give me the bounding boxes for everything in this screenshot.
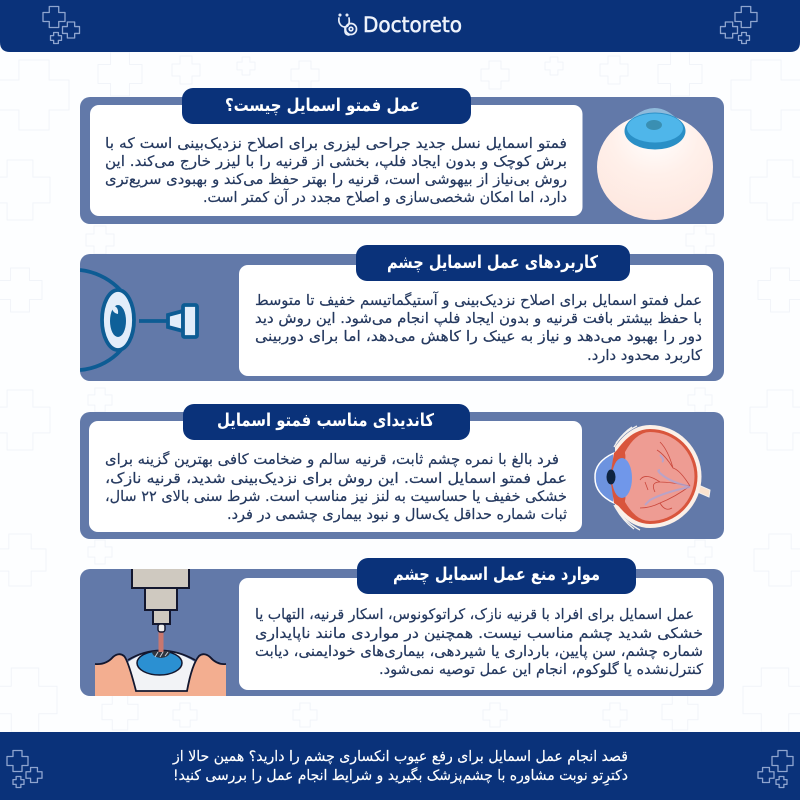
heading bar [356,245,630,281]
body text: خشکی خفیف یا حساسیت به لنز نیز مناسب است. شرط سنی بالای ۲۲ سال، [105,489,567,505]
body text: عمل اسمایل برای افراد با قرنیه نازک، کراتوکونوس، اسکار قرنیه، التهاب یا [255,607,694,623]
icon: eyeball with contact lens [597,108,713,220]
text box [239,265,713,376]
body text: عمل فمتو اسمایل است. این روش برای نزدیک‌بینی شدید، قرنیه نازک، [105,471,567,487]
body text: کاربرد محدود دارد. [587,348,702,364]
heading: کاربردهای عمل اسمایل چشم [387,253,599,273]
text box [239,578,713,690]
text box [90,105,582,216]
body text: دور را بهبود می‌دهد و نیاز به عینک را کاهش می‌دهد، اما برای دوربینی [255,329,702,345]
body text: ثبات شماره حداقل یک‌سال و نبود بیماری چشمی در فرد. [227,507,567,523]
body text: خشکی شدید چشم مناسب نیست. همچنین در مواردی مانند ناپایداری [255,626,703,642]
footer text: قصد انجام عمل اسمایل برای رفع عیوب انکساری چشم را دارید؟ همین حالا از [172,749,628,765]
icon: header crosses right [720,6,757,44]
icon: header crosses left [43,6,80,44]
body text: عمل فمتو اسمایل برای اصلاح نزدیک‌بینی و آستیگماتیسم خفیف تا متوسط [255,291,702,309]
heading bar [357,558,636,594]
heading bar [183,404,470,440]
body text [105,136,567,206]
body text: شماره چشم، سن پایین، بارداری یا شیردهی، بیماری‌های خودایمنی، دیابت [255,644,703,660]
logo: wordmark: Doctoreto [363,13,462,37]
body text: با حفظ بیشتر بافت قرنیه و بدون ایجاد فلپ انجام می‌شود. این روش دید [255,311,702,327]
heading: عمل فمتو اسمایل چیست؟ [225,96,420,116]
footer text: دکترِتو نوبت مشاوره با چشم‌پزشک بگیرید و شرایط انجام عمل را بررسی کنید! [173,767,628,786]
body text: دارد، اما امکان شخصی‌سازی و اصلاح مجدد در آن کمتر است. [203,188,567,206]
body text [255,291,702,364]
panel: contraindications [80,558,724,696]
logo: stethoscope icon [339,14,356,35]
footer bar [0,732,800,800]
heading bar [182,88,471,124]
body text: برش کوچک و بدون ایجاد فلپ، بخشی از قرنیه را با لیزر خارج می‌کند. این [105,154,567,171]
icon: footer crosses left [7,750,42,788]
icon: footer crosses right [758,750,793,788]
icon: eye with laser device [80,270,197,370]
footer text [172,749,628,786]
icon: eye anatomy [595,425,710,530]
heading: موارد منع عمل اسمایل چشم [393,565,600,585]
body text [105,451,567,523]
panel: applications [80,245,724,381]
panel: suitable candidates [80,404,724,539]
body text: روش بی‌نیاز از بیهوشی است، قرنیه را بهتر حفظ می‌کند و بهبودی سریع‌تری [105,172,567,188]
body text: کنترل‌نشده یا گلوکوم، انجام این عمل توصیه نمی‌شود. [379,661,703,678]
body text: فرد بالغ با نمره چشم ثابت، قرنیه سالم و ضخامت کافی بهترین گزینه برای [105,451,559,468]
icon: laser device over eye [95,566,226,696]
panel: what is femto smile [80,88,724,224]
body text [255,607,703,678]
body text: فمتو اسمایل نسل جدید جراحی لیزری برای اصلاح نزدیک‌بینی است که با [105,136,567,152]
heading: کاندیدای مناسب فمتو اسمایل [217,411,435,431]
header bar [0,0,800,52]
text box [89,421,582,532]
